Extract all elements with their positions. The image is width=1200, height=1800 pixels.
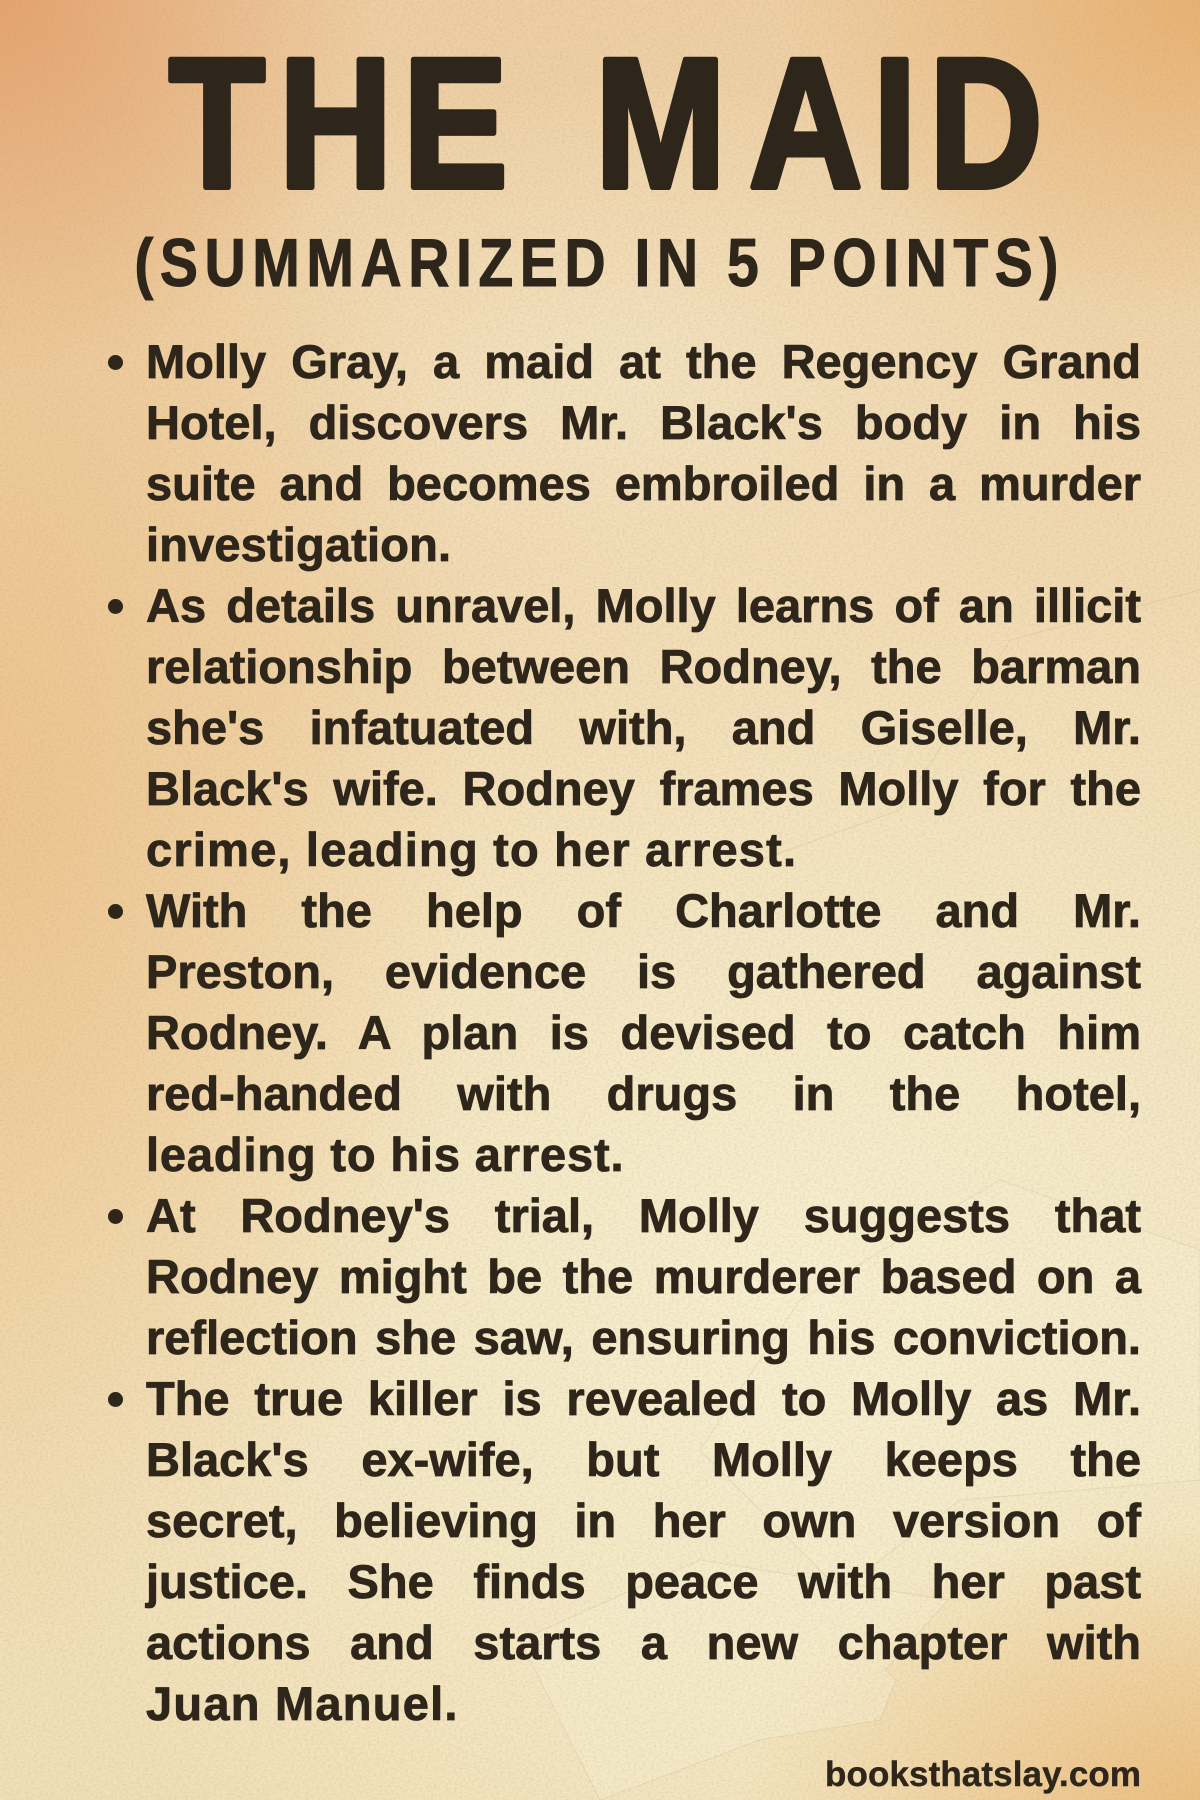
bullet point 5: The true killer is revealed to Molly as Mr. — [146, 1372, 1141, 1425]
bullet point 4 — [108, 1189, 1142, 1364]
bullet point 3: With the help of Charlotte and Mr. — [146, 884, 1141, 937]
bullet point 3: leading to his arrest. — [146, 1128, 624, 1181]
bullet point 2: Black's wife. Rodney frames Molly for the — [146, 762, 1141, 815]
bullet point 5: secret, believing in her own version of — [146, 1494, 1141, 1547]
bullet point 1: Hotel, discovers Mr. Black's body in his — [146, 396, 1141, 449]
bullet point 1: suite and becomes embroiled in a murder — [146, 457, 1141, 510]
bullet point 1: investigation. — [146, 518, 451, 571]
bullet point 5 — [108, 1372, 1142, 1730]
bullet point 5: justice. She finds peace with her past — [146, 1555, 1141, 1608]
title: THE MAID — [169, 21, 1043, 227]
bullet point 4: reflection she saw, ensuring his conviction. — [146, 1311, 1141, 1364]
bullet point 3: Preston, evidence is gathered against — [146, 945, 1141, 998]
bullet point 3: red-handed with drugs in the hotel, — [146, 1067, 1141, 1120]
bullet point 5: actions and starts a new chapter with — [146, 1616, 1141, 1669]
bullet point 3: Rodney. A plan is devised to catch him — [146, 1006, 1141, 1059]
bullet point 4: At Rodney's trial, Molly suggests that — [146, 1189, 1141, 1242]
bullet point 2: As details unravel, Molly learns of an illicit — [146, 579, 1141, 632]
bullet point 5: Black's ex-wife, but Molly keeps the — [146, 1433, 1141, 1486]
bullet point 2: relationship between Rodney, the barman — [146, 640, 1141, 693]
bullet point 4: Rodney might be the murderer based on a — [146, 1250, 1141, 1303]
bullet point 2 — [108, 579, 1141, 876]
bullet point 2: crime, leading to her arrest. — [146, 823, 797, 876]
bullet point 2: she's infatuated with, and Giselle, Mr. — [146, 701, 1141, 754]
bullet point 1 — [108, 335, 1141, 572]
bullet point 5: Juan Manuel. — [146, 1677, 459, 1730]
bullet point 1: Molly Gray, a maid at the Regency Grand — [146, 335, 1141, 388]
subtitle: (SUMMARIZED IN 5 POINTS) — [134, 225, 1058, 301]
bullet point 3 — [108, 884, 1141, 1182]
footer: website credit: booksthatslay.com — [825, 1755, 1141, 1794]
